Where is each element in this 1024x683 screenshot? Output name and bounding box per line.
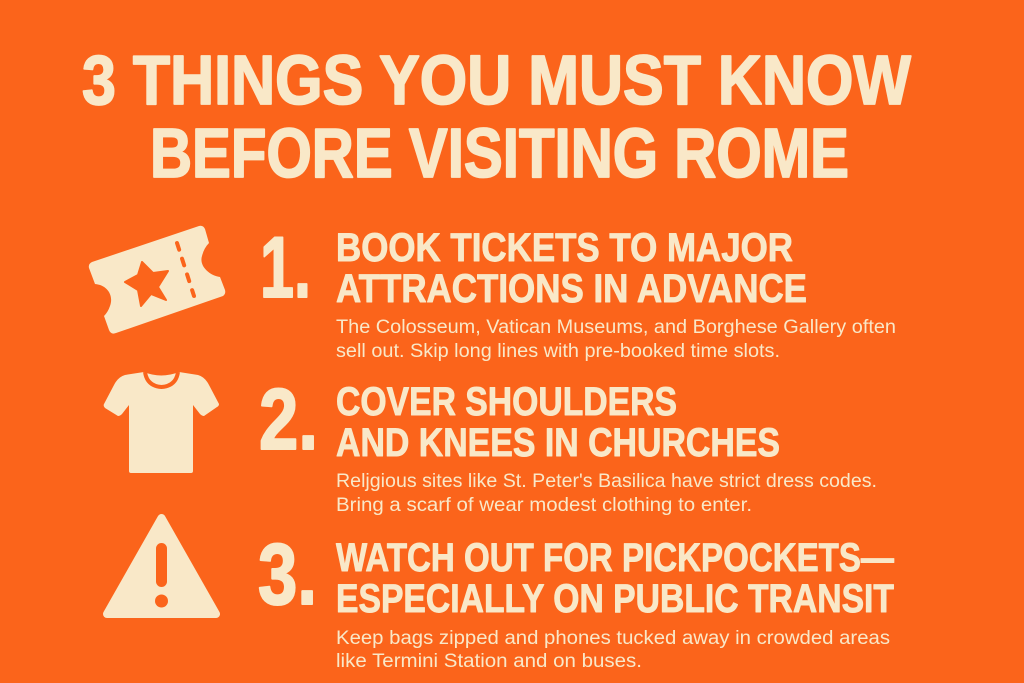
- heading 1: [336, 226, 807, 311]
- description 3: [336, 628, 890, 672]
- number 3: 3.: [258, 527, 317, 623]
- panel: tip 3: [107, 518, 894, 672]
- description 3: like Termini Station and on buses.: [336, 651, 642, 672]
- heading 1: BOOK TICKETS TO MAJOR: [336, 226, 793, 270]
- heading 3: [336, 536, 894, 621]
- icon: ticket with star: [89, 226, 225, 334]
- description 1: sell out. Skip long lines with pre-booked time slots.: [336, 341, 780, 362]
- heading 2: AND KNEES IN CHURCHES: [336, 421, 780, 465]
- description 3: Keep bags zipped and phones tucked away in crowded areas: [336, 628, 890, 649]
- number 1: 1.: [260, 220, 311, 316]
- panel: tip 2: [104, 372, 877, 516]
- title: 3 THINGS YOU MUST KNOW: [82, 41, 911, 119]
- heading 2: [336, 380, 780, 465]
- panel: tip 1: [89, 220, 896, 362]
- description 1: [336, 317, 896, 362]
- number 2: 2.: [259, 372, 318, 468]
- title: [82, 41, 911, 192]
- description 1: The Colosseum, Vatican Museums, and Borghese Gallery often: [336, 317, 896, 338]
- description 2: Reljgious sites like St. Peter's Basilica have strict dress codes.: [336, 471, 877, 492]
- icon: warning triangle: [107, 518, 216, 614]
- description 2: [336, 471, 877, 516]
- heading 1: ATTRACTIONS IN ADVANCE: [336, 267, 807, 311]
- heading 2: COVER SHOULDERS: [336, 380, 677, 424]
- heading 3: ESPECIALLY ON PUBLIC TRANSIT: [336, 577, 894, 621]
- title: BEFORE VISITING ROME: [150, 114, 849, 192]
- icon: t-shirt: [104, 372, 219, 473]
- description 2: Bring a scarf of wear modest clothing to enter.: [336, 495, 752, 516]
- heading 3: WATCH OUT FOR PICKPOCKETS—: [336, 536, 894, 580]
